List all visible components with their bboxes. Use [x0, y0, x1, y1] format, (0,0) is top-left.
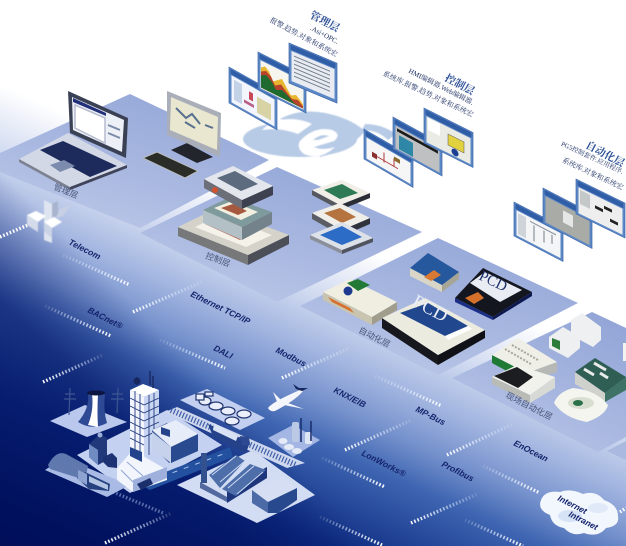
label: DALI: DALI — [212, 343, 235, 361]
label: Internet: Internet — [556, 493, 590, 517]
heading: control layer: 系统库.报警.趋势.对象和系统宏 — [382, 69, 475, 119]
panel: field automation layer plate — [452, 312, 626, 452]
device stack: touch panels — [310, 180, 373, 254]
label: Intranet: Intranet — [567, 509, 601, 533]
protocol labels — [67, 237, 550, 484]
label: KNX/EIB: KNX/EIB — [332, 385, 368, 410]
heading: automation layer: 系统库.对象和系统宏 — [561, 156, 625, 192]
label: MP-Bus: MP-Bus — [414, 404, 447, 427]
building: sawtooth factory — [200, 455, 267, 503]
plate: train — [45, 458, 130, 497]
heading: control layer: HMI编辑器.Web编辑器. — [407, 66, 475, 107]
device: green label controller — [323, 279, 397, 325]
screens: automation layer — [514, 179, 625, 261]
heading: management layer: .Asi+OPC. — [309, 24, 340, 46]
laptop keyboard — [40, 141, 117, 177]
device: dark PCD controller — [455, 268, 532, 320]
screen: grey dialog — [393, 117, 442, 176]
building: stepped podium — [117, 447, 167, 492]
icon: pylon left — [64, 388, 76, 415]
building: low IP block — [152, 420, 198, 463]
plate: factory — [177, 450, 315, 523]
plate: refinery — [268, 425, 320, 457]
icon: airplane — [268, 384, 308, 411]
desktop keyboard — [143, 152, 198, 178]
heading: management layer: 管理层 — [308, 8, 342, 35]
plate: tanks — [180, 389, 265, 430]
screens: control layer — [364, 108, 473, 187]
plate: central — [77, 410, 222, 493]
device stack: control panels — [178, 166, 289, 265]
label: Profibus: Profibus — [440, 459, 476, 484]
device: dark PCD controller: PCD — [476, 268, 510, 295]
device: blue terminal controller — [410, 253, 459, 292]
screens: management layer — [229, 43, 337, 130]
vehicle: train and tunnel — [48, 453, 110, 491]
screen: blocks — [576, 179, 625, 238]
building: warehouse — [252, 477, 297, 513]
label: EnOcean: EnOcean — [512, 438, 550, 464]
device: desktop monitor — [143, 91, 221, 178]
touch panel middle — [312, 213, 342, 236]
screen: function plan — [514, 202, 563, 261]
label: field automation layer: 现场自动化层 — [504, 390, 554, 422]
device: terminal module lower — [492, 365, 555, 403]
screen: plant diagram — [229, 67, 277, 130]
screen: table list — [289, 43, 337, 103]
screen: grey editor — [543, 188, 592, 248]
label: control layer: 控制层 — [204, 250, 232, 269]
icons: round storage tanks — [196, 392, 251, 425]
device: round white sensor — [554, 388, 608, 422]
screen: trend chart — [258, 52, 306, 113]
panel: lower right plate corner — [607, 441, 626, 460]
building: left block — [89, 432, 117, 468]
layer labels — [52, 182, 554, 422]
illustration: city and industry — [45, 371, 320, 523]
label: Ethernet TCP/IP: Ethernet TCP/IP — [189, 289, 252, 326]
screen: yellow panel — [424, 108, 473, 168]
device: large PCD controller: PCD — [409, 291, 451, 327]
label: Telecom: Telecom — [67, 237, 103, 262]
device: green circuit module — [575, 358, 626, 402]
heading: management layer: 报警.趋势.对象和系统宏 — [268, 15, 339, 59]
building: office tower — [130, 371, 159, 460]
panel: control layer plate — [140, 167, 422, 302]
label: automation layer: 自动化层 — [357, 325, 392, 349]
device: room sensor front — [549, 327, 580, 358]
label: BACnet: BACnet® — [86, 305, 125, 331]
icon: pylon right — [111, 388, 124, 413]
icons: refinery tanks — [278, 418, 312, 454]
panel unit top — [204, 179, 242, 209]
panel unit middle — [203, 210, 242, 240]
panel: automation layer plate — [300, 238, 578, 375]
screen: process schematic — [364, 129, 413, 187]
monitor frame — [167, 91, 221, 157]
device: partial white device at right edge — [623, 343, 626, 361]
monitor stand — [171, 143, 213, 163]
panel: management layer plate — [0, 94, 269, 228]
device: terminal module upper — [492, 338, 557, 382]
icon: cloud with Internet and Intranet — [540, 490, 618, 535]
heading: automation layer: PG5控制套件.应用程序. — [560, 139, 625, 176]
touch panel top — [312, 190, 340, 210]
touch panel bottom — [310, 235, 342, 254]
label: LonWorks: LonWorks® — [360, 448, 408, 479]
data line stripes — [0, 225, 626, 546]
heading: automation layer: 自动化层 — [584, 138, 626, 170]
label: management layer: 管理层 — [52, 182, 80, 200]
heading: control layer: 控制层 — [443, 71, 477, 98]
laptop screen — [68, 91, 128, 158]
building: chimney — [201, 453, 207, 483]
road: striped rail — [165, 407, 305, 468]
label: Modbus: Modbus — [274, 345, 308, 369]
device: laptop — [19, 91, 128, 190]
panel unit bottom — [178, 227, 248, 265]
icon: antenna cross — [27, 200, 70, 243]
laptop touchpad — [50, 160, 75, 172]
road: dark street — [137, 447, 233, 490]
vehicle: truck — [137, 478, 153, 490]
plate: cooling tower — [50, 405, 127, 437]
device: room sensor back — [571, 313, 601, 347]
vehicle: ship on rail — [208, 423, 250, 453]
heading: automation layer — [560, 138, 626, 192]
device: large PCD controller — [382, 291, 485, 365]
logo: blue e emblem — [243, 111, 396, 157]
icon: cooling tower — [78, 390, 107, 427]
laptop base — [19, 133, 127, 187]
